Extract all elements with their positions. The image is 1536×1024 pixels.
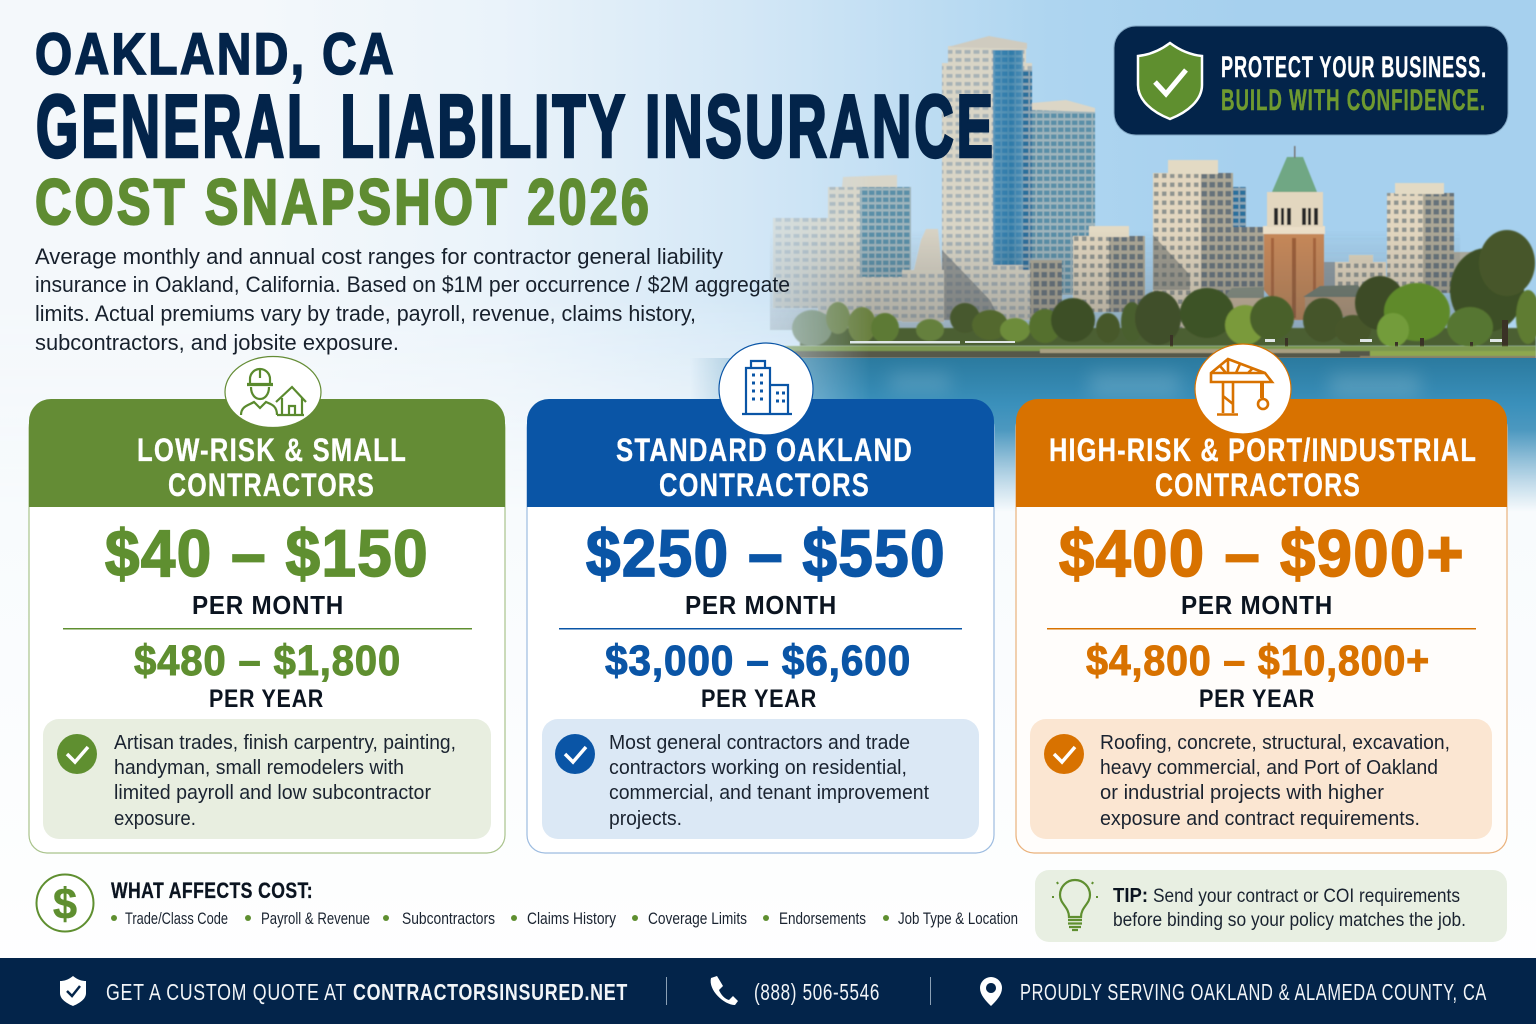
icon: check xyxy=(555,734,595,774)
description text: contractors working on residential, xyxy=(609,757,907,779)
panel heading: CONTRACTORS xyxy=(659,467,870,503)
lower building shading xyxy=(770,244,1460,330)
what affects cost strip xyxy=(36,874,1018,932)
icon: tower crane xyxy=(1195,344,1291,434)
title line: Oakland, CA: OAKLAND, CA xyxy=(35,22,396,87)
water reflections xyxy=(890,372,1420,398)
badge: protect your business xyxy=(1114,26,1508,135)
description text: handyman, small remodelers with xyxy=(114,757,404,779)
intro paragraph: subcontractors, and jobsite exposure. xyxy=(35,330,399,355)
title line: Cost Snapshot 2026: COST SNAPSHOT 2026 xyxy=(35,166,652,238)
panel heading: STANDARD OAKLAND xyxy=(616,432,913,468)
description text: exposure and contract requirements. xyxy=(1100,808,1420,830)
quote call to action: CONTRACTORSINSURED.NET xyxy=(353,979,628,1005)
cost factor list: Payroll & Revenue xyxy=(261,909,370,928)
tree line xyxy=(792,230,1536,347)
panel heading: LOW-RISK & SMALL xyxy=(137,432,407,468)
icon: check xyxy=(1044,734,1084,774)
per year label: PER YEAR xyxy=(701,685,817,713)
description box xyxy=(542,719,979,839)
description text: Roofing, concrete, structural, excavation, xyxy=(1100,732,1450,754)
cost factor list: Coverage Limits xyxy=(648,909,747,928)
annual price: $4,800 – $10,800+ xyxy=(1086,637,1430,685)
panel header xyxy=(1016,399,1507,507)
description text: projects. xyxy=(609,808,682,830)
panel heading: CONTRACTORS xyxy=(1155,467,1361,503)
lake water xyxy=(698,358,1536,506)
clock tower xyxy=(1263,146,1325,320)
description text xyxy=(609,732,929,830)
description text: Artisan trades, finish carpentry, painting, xyxy=(114,732,456,754)
strip heading: WHAT AFFECTS COST: xyxy=(111,878,313,903)
icon: location pin xyxy=(980,977,1002,1006)
tip text: Send your contract or COI requirements xyxy=(1153,885,1460,907)
tree trunks and park details xyxy=(1170,320,1508,347)
annual price: $480 – $1,800 xyxy=(134,637,401,685)
monthly price: $40 – $150 xyxy=(105,516,429,590)
main tower xyxy=(942,36,1062,320)
icon: dollar circle xyxy=(36,874,94,932)
tip text: before binding so your policy matches the job. xyxy=(1113,909,1466,931)
description text: heavy commercial, and Port of Oakland xyxy=(1100,757,1438,779)
description text: exposure. xyxy=(114,808,196,830)
monthly price: $400 – $900+ xyxy=(1059,516,1465,590)
right tan tower xyxy=(1387,183,1454,293)
per year label: PER YEAR xyxy=(209,685,324,713)
city and lake photo illustration xyxy=(640,36,1536,513)
panel heading xyxy=(1049,432,1477,503)
cost factor list: Trade/Class Code xyxy=(125,909,228,928)
description text: limited payroll and low subcontractor xyxy=(114,782,431,804)
intro paragraph: insurance in Oakland, California. Based on $1M per occurrence / $2M aggregate xyxy=(35,272,790,297)
quote call to action: GET A CUSTOM QUOTE AT xyxy=(106,979,347,1005)
panel: high-risk contractors xyxy=(1016,344,1507,853)
description box xyxy=(1030,719,1492,839)
panel heading xyxy=(137,432,407,503)
large tan tower xyxy=(1153,160,1264,333)
tip text: TIP: xyxy=(1113,885,1148,907)
intro paragraph: Average monthly and annual cost ranges for contractor general liability xyxy=(35,244,723,269)
annual price: $3,000 – $6,600 xyxy=(605,637,911,685)
tip callout xyxy=(1035,870,1507,942)
monthly price: $250 – $550 xyxy=(586,516,946,590)
description text xyxy=(1100,732,1450,830)
glass mid-rise xyxy=(828,175,911,287)
icon: check xyxy=(57,734,97,774)
footer bar xyxy=(0,958,1536,1024)
low right buildings xyxy=(1323,252,1472,292)
shoreline xyxy=(780,346,1536,360)
intro paragraph xyxy=(35,244,790,355)
icon: white shield xyxy=(60,976,86,1006)
description box xyxy=(43,719,491,839)
icon: light bulb xyxy=(1052,880,1098,930)
cost factor list xyxy=(111,909,1018,928)
quote call to action xyxy=(106,979,628,1005)
panel header xyxy=(29,399,505,507)
per year label: PER YEAR xyxy=(1199,685,1315,713)
description text: or industrial projects with higher xyxy=(1100,782,1384,804)
low centre building xyxy=(1073,226,1145,312)
low left buildings xyxy=(818,229,944,322)
icon: dollar circle: $ xyxy=(53,880,77,929)
icon: green shield with check xyxy=(1138,43,1202,119)
cost factor list: Endorsements xyxy=(779,909,866,928)
per month label: PER MONTH xyxy=(192,590,344,620)
per month label: PER MONTH xyxy=(685,590,837,620)
tower two xyxy=(1032,100,1095,295)
tip text xyxy=(1113,885,1466,931)
title block xyxy=(35,22,996,238)
panel: standard contractors xyxy=(527,343,994,853)
cost factor list: Subcontractors xyxy=(402,909,495,928)
panel header xyxy=(527,399,994,507)
intro paragraph: limits. Actual premiums vary by trade, payroll, revenue, claims history, xyxy=(35,301,696,326)
description text xyxy=(114,732,456,830)
vehicles along the shore xyxy=(850,339,1502,344)
phone number: (888) 506-5546 xyxy=(754,979,880,1005)
description text: commercial, and tenant improvement xyxy=(609,782,929,804)
icon: worker and house xyxy=(225,356,321,428)
icon: phone xyxy=(711,976,738,1005)
sky gradient xyxy=(391,0,1536,474)
panel heading: CONTRACTORS xyxy=(168,467,375,503)
far left building xyxy=(773,218,828,308)
buildings xyxy=(770,36,1472,333)
description text: Most general contractors and trade xyxy=(609,732,910,754)
cost factor list: Claims History xyxy=(527,909,616,928)
park pavilions xyxy=(1226,284,1360,318)
per month label: PER MONTH xyxy=(1181,590,1333,620)
panel: low-risk contractors xyxy=(29,356,505,853)
icon: office buildings xyxy=(719,343,813,435)
panel heading xyxy=(616,432,913,503)
cost factor list: Job Type & Location xyxy=(898,909,1018,928)
